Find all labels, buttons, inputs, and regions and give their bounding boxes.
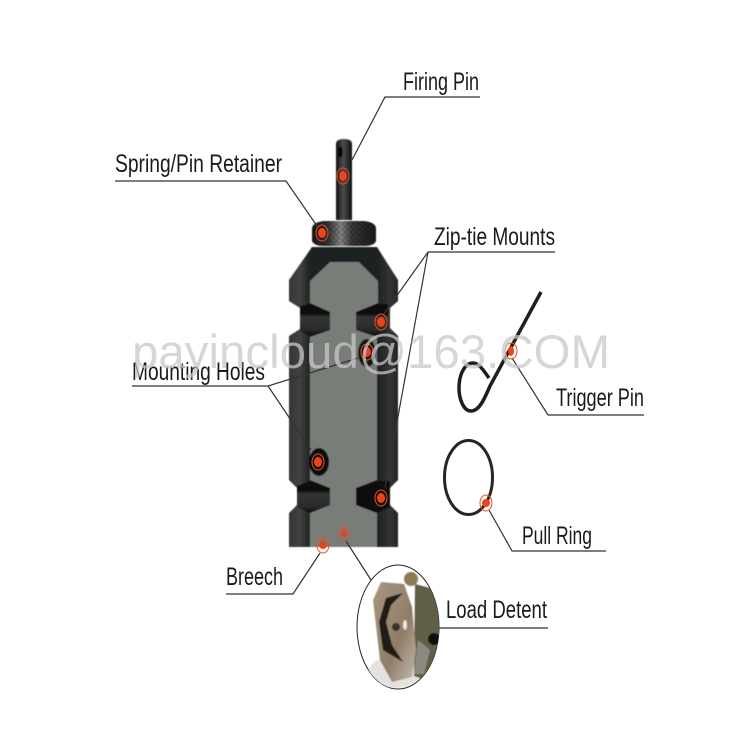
trigger pin wire <box>459 292 541 411</box>
retainer leader <box>115 181 317 226</box>
tool body <box>289 139 398 547</box>
brass pin <box>404 572 418 586</box>
knurled retainer collar <box>312 221 376 246</box>
collar knurling <box>312 221 376 246</box>
trigger pin leader <box>512 358 644 415</box>
breech leader <box>226 553 320 594</box>
metal plate <box>373 582 416 682</box>
olive housing <box>413 584 439 679</box>
label: Firing Pin: Firing Pin <box>403 68 479 96</box>
trigger pin marker <box>505 343 517 359</box>
load detent leader <box>346 541 548 628</box>
inset circle <box>357 565 439 689</box>
firing pin leader <box>352 97 480 160</box>
retainer marker <box>316 225 328 241</box>
dark hole <box>428 633 440 645</box>
pull ring marker <box>480 495 492 511</box>
firing pin marker <box>337 168 349 184</box>
red markers <box>312 168 517 553</box>
mounting hole marker lower <box>312 454 324 470</box>
pull ring <box>444 440 492 514</box>
grey lower bracket <box>414 640 430 674</box>
mounting holes leaders <box>132 358 358 450</box>
label: Zip-tie Mounts: Zip-tie Mounts <box>434 223 555 251</box>
zip-tie marker lower <box>375 490 387 506</box>
label: Spring/Pin Retainer: Spring/Pin Retainer <box>115 150 282 178</box>
upper mounting hole <box>358 339 376 367</box>
label: Pull Ring: Pull Ring <box>522 522 592 550</box>
load detent marker <box>338 525 350 541</box>
leader lines <box>115 97 644 628</box>
housing <box>289 247 398 547</box>
zip-tie leaders <box>383 252 555 488</box>
load detent inset <box>357 565 445 689</box>
pin slot <box>338 147 342 157</box>
lower notch left <box>297 481 330 513</box>
breech marker <box>317 537 329 553</box>
lower notch right <box>356 481 390 513</box>
infographic: firing mechanism parts diagram <box>115 72 644 690</box>
label: Breech: Breech <box>226 563 283 591</box>
label: Load Detent: Load Detent <box>446 596 547 624</box>
soft shadow <box>369 656 421 688</box>
dark recess <box>379 593 403 662</box>
grey flat face <box>310 262 378 547</box>
watermark: payincloud@163.COM <box>132 325 610 378</box>
pull ring leader <box>489 510 606 551</box>
upper notch right <box>356 304 388 336</box>
lower mounting hole <box>309 448 329 476</box>
mounting hole marker upper <box>361 344 373 360</box>
label: Mounting Holes: Mounting Holes <box>132 358 265 386</box>
small screw <box>392 623 400 631</box>
label: Trigger Pin: Trigger Pin <box>556 384 644 412</box>
firing pin <box>336 139 352 220</box>
zip-tie marker upper <box>375 314 387 330</box>
upper notch left <box>300 304 330 336</box>
